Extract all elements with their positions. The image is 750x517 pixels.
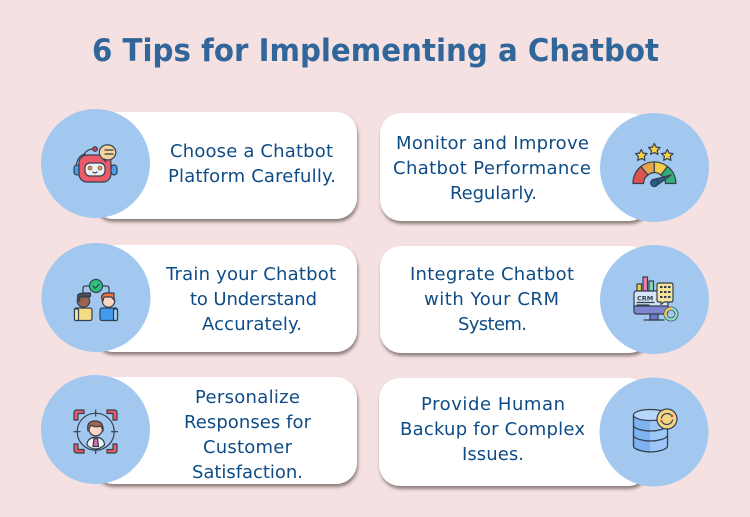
text: monitor and improve chatbot performance regularly: Regularly. [450,183,537,204]
panel: monitor and improve performance [380,113,709,222]
text: train your chatbot to understand accurately: to Understand [190,289,317,310]
text: integrate chatbot with your CRM system: Integrate Chatbot [410,264,574,285]
panel: provide human backup [379,378,708,486]
text: choose a chatbot platform carefully [168,141,336,187]
title: 6 Tips for Implementing a Chatbot [92,33,659,69]
text: choose a chatbot platform carefully: Platform Carefully. [168,166,336,187]
icon: person in target with brackets [74,410,118,454]
icon: database with sync badge [634,409,677,452]
text: monitor and improve chatbot performance regularly [393,133,591,204]
text: integrate chatbot with your CRM system: with Your CRM [424,289,559,310]
panel: integrate with CRM [380,245,709,354]
text: monitor and improve chatbot performance regularly: Monitor and Improve [396,133,589,154]
icon: rating gauge with stars [633,144,676,187]
text: integrate chatbot with your CRM system: System. [458,314,527,335]
text: train your chatbot to understand accurately: Train your Chatbot [165,264,336,285]
panel: choose a chatbot platform [41,109,357,219]
icon: CRM monitor with data: CRM [637,294,653,302]
text: integrate chatbot with your CRM system [410,264,574,335]
text: personalize responses for customer satisfaction [184,387,312,483]
icon: CRM monitor with data [634,277,676,320]
text: train your chatbot to understand accurately [165,264,336,335]
icon: robot with speech bubble [74,145,117,182]
text: personalize responses for customer satisfaction: Responses for [184,412,312,433]
text: personalize responses for customer satisfaction: Customer [203,437,293,458]
text: provide human backup for complex issues: Provide Human [421,394,565,415]
text: personalize responses for customer satisfaction: Satisfaction. [192,462,303,483]
text: personalize responses for customer satisfaction: Personalize [195,387,300,408]
text: provide human backup for complex issues: Backup for Complex [400,419,585,440]
panel: personalize responses [41,375,357,484]
text: provide human backup for complex issues [400,394,585,465]
icon: two people with check mark [74,280,118,320]
text: provide human backup for complex issues: Issues. [462,444,524,465]
text: choose a chatbot platform carefully: Choose a Chatbot [170,141,333,162]
panel: train your chatbot [42,243,357,352]
text: train your chatbot to understand accurately: Accurately. [202,314,302,335]
text: monitor and improve chatbot performance regularly: Chatbot Performance [393,158,591,179]
